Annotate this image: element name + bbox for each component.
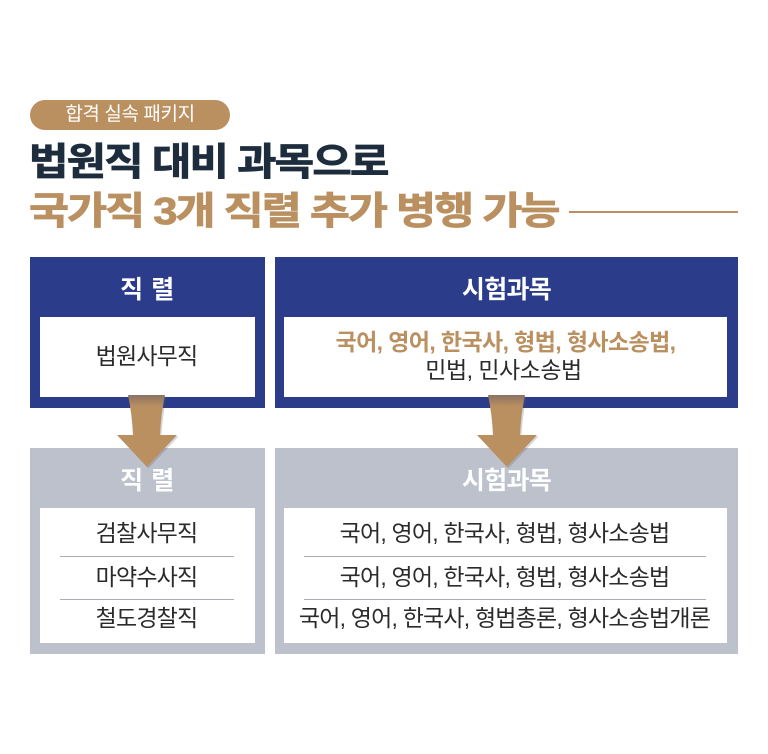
heading: 시험과목: 시험과목 <box>462 467 551 495</box>
panel: national subjects <box>275 448 738 654</box>
heading: 직렬: 직 렬 <box>120 467 175 495</box>
content box: subjects <box>284 317 727 397</box>
job: 마약수사직: 마약수사직 <box>96 564 197 590</box>
title line 1: 법원직 대비 과목으로 <box>29 142 388 184</box>
highlighted subjects: 국어, 영어, 한국사, 형법, 형사소송법, <box>336 329 675 355</box>
panel: current job <box>30 257 265 408</box>
badge: 합격 실속 패키지: 합격 실속 패키지 <box>65 104 195 125</box>
panel: national job <box>30 448 265 654</box>
icon: arrow left <box>117 395 178 468</box>
panel: current subjects <box>275 257 738 408</box>
other subjects: 민법, 민사소송법 <box>425 357 582 383</box>
icon: arrow right <box>477 395 538 468</box>
content box: job list <box>40 508 255 643</box>
subjects row 3: 국어, 영어, 한국사, 형법총론, 형사소송법개론 <box>299 605 710 631</box>
heading: 시험과목: 시험과목 <box>462 276 551 304</box>
content box: 법원사무직: 법원사무직 <box>96 343 197 369</box>
job: 검찰사무직: 검찰사무직 <box>96 520 197 546</box>
subjects row 1: 국어, 영어, 한국사, 형법, 형사소송법 <box>340 520 669 546</box>
badge: 합격 실속 패키지 <box>30 100 230 130</box>
job: 철도경찰직: 철도경찰직 <box>96 605 197 631</box>
title rule <box>569 211 738 213</box>
content box: subject list <box>284 508 727 643</box>
subjects row 2: 국어, 영어, 한국사, 형법, 형사소송법 <box>340 564 669 590</box>
content box: 법원사무직 <box>40 317 255 397</box>
heading: 직렬: 직 렬 <box>120 276 175 304</box>
title line 2: 국가직 3개 직렬 추가 병행 가능 <box>29 191 558 233</box>
